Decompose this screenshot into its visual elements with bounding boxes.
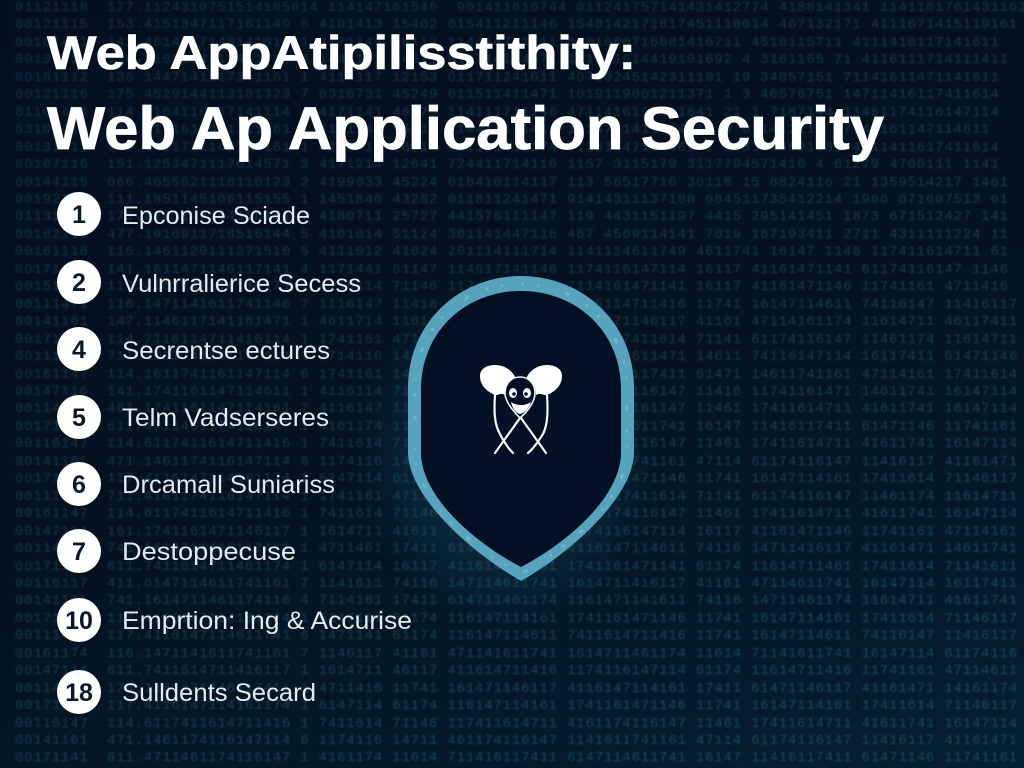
item 3: 4 xyxy=(72,336,86,364)
item 6: Destoppecuse xyxy=(122,538,296,566)
item 5: Drcamall Suniariss xyxy=(122,471,335,499)
item 1: Epconise Sciade xyxy=(122,202,310,230)
item 2: Vulnrralierice Secess xyxy=(122,270,361,298)
item 6 xyxy=(57,529,296,573)
item 4: Telm Vadserseres xyxy=(122,404,329,432)
title line 2: Web Ap Application Security xyxy=(47,95,885,162)
icon: mascot xyxy=(480,365,562,453)
item 2: 2 xyxy=(72,269,86,297)
shield xyxy=(408,276,634,581)
item 1: 1 xyxy=(72,201,86,229)
item 4: 5 xyxy=(72,404,86,432)
item 2 xyxy=(57,260,361,304)
item 6: 7 xyxy=(72,538,86,566)
item 7: Emprtion: Ing & Accurise xyxy=(122,607,412,635)
item 8: 18 xyxy=(65,679,93,707)
item 3: Secrentse ectures xyxy=(122,337,330,365)
item 8: Sulldents Secard xyxy=(122,679,316,707)
item 1 xyxy=(57,192,310,236)
item 7 xyxy=(57,598,412,642)
numbered list xyxy=(57,192,412,714)
item 7: 10 xyxy=(65,607,93,635)
title line 1: Web AppAtipilisstithity: xyxy=(47,26,636,79)
item 3 xyxy=(57,327,330,371)
item 5 xyxy=(57,462,335,506)
text: 01121118 177.1124310751514185614 114147161546 901411616744 011241757141431412774 4188141341 1141161761431161 00121115 153.4151347117161149 6 4101413 15402 015411211146 1540142171617451110014 467132171 4111671415119161 00101411 141.4614117148141016 1 4171144 16112 114414711711 0101000716081416711 4510115711 4111410117141611 00131714 116.4101114111461718 4 1441171 14611 011714114471 101311614419101692 4 3161165 71 4116111714111411 00181112 136.1447141117141161 1 4114117 12153 011711241611 40730245142311101 19 34057151 71141611471141611 00121116 175.4529144113181323 7 8316731 45249 011511411471 1019119001211371 1 3 40576751 14711416117411614 01101474 114.1164116117141114 4 4171141 46170 114111711146 4711416117461641 21 1 7187144 11461174116147114 03101411 141.1171611411711461 1 4171144 16112 114417171411 1614711411614711 4 6 1412119 17141161147114611 00131411 146.1411711149714161 1 4114714 16114 411161411174 4116114711 461 1 1233 44691331 4711411617411614 00107116 151.1253471117614571 3 4171214 12641 724411714116 1157 3115179 3117794571410 4 61279 4700111 1141 00144115 066.4655621118110123 2 4199033 45224 018410114117 113 56517716 30118 15 8824116 21 1359514217 1461 00192141 111.1851145106115155 1 1451840 43282 011811241471 91414311137188 684511735412214 1966 071607513 61 01131414 171.4161147114116141 1 4180711 25727 441576111147 119 4431151197 4415 295141451 1873 671512427 141 00182116 477.1916911718516144 5 4101014 51124 301141447116 467 4509114141 7019 167193411 2711 4311111224 11 00161118 116.1461120111271510 5 4111012 41024 201114111714 1141114611749 4611741 16147 1146 117411614711 61 00171141 141.1611471146117141 4 1171441 61147 114617141146 1174116147114 16117 41161471141 61174116147 1146 00151141 117.4161147114116171 1 4116114 71146 117414116114 7114161471141 16117 41161471146 11741161 4711416 00111471 116.1471141611741146 7 1116147 11416 117411161471 4116114711416 11741 16147114611 74116147 11416117 00141161 147.1146117141161471 1 4611714 11611 471141611741 1611471146117 41161 47114161174 11614711 46117411 00171146 114.7116114711416114 1 1741161 47114 161174116147 1146117411614 71141 61174116147 11461174 11614711 00111614 711.4611741161147114 1 1714116 14711 461171411611 4711411611471 14611 74116147114 16117411 61471146 00161147 114.1611741161147114 6 1741161 14711 416117141161 4711416117411 61471 14611741161 47114161 17411614 00147116 141.1741161147114611 1 4116114 71141 611741161471 1461174116147 11416 11741161471 14611741 16147114 00114711 461.1741161147114161 7 4116147 11416 117411614711 4611741161147 11461 17411614711 41611741 16147114 00171141 611.4711461174116147 1 4161174 11614 711416117411 6147114611741 16147 11416117411 61471146 11741161 00116147 114.6117411614711416 1 7411614 71146 117411614711 4161174116147 11461 17411614711 41611741 16147114 00141161 471.1461174116147114 6 1174116 14711 461174116147 1141611741161 47114 61174116147 11416117 41161471 00171146 117.4116147114161174 1 6147114 61174 116147114161 1741161471146 11741 16147114161 17411614 71146117 00111614 711.4161174116147114 1 1741161 47114 161174116147 1146117411614 71141 61174116147 11461174 11614711 00161147 114.6117411614711416 1 7411614 71146 117411614711 4161174116147 11461 17411614711 41611741 16147114 00147114 161.1741161471146117 1 1614711 41611 741161471146 1174116147114 16117 41161471146 11741161 47114161 00114611 741.1614711416117411 1 4711461 17411 614711416117 4116147114611 74116 14711416117 41161471 14611741 00171141 611.7411614711461174 1 6147114 16117 411614711461 1741161471141 61174 11614711461 17411614 71141611 00116117 411.6147114611741161 7 1141611 74116 147114611741 1614711416117 41161 47114611741 16147114 16117411 00141161 741.1614711461174116 4 7114161 17411 614711461174 1161471141611 74116 14711461174 11614711 41611741 00171146 117.4116147114161174 1 6147114 61174 116147114161 1741161471146 11741 16147114161 17411614 71146117 00111416 117.4116147114611741 6 1471141 61174 116147114611 7411614711416 11741 16147114611 74116147 xyxy=(15,0,1024,766)
item 5: 6 xyxy=(72,471,86,499)
shield glow xyxy=(355,270,655,630)
item 4 xyxy=(57,395,329,439)
item 8 xyxy=(57,670,316,714)
